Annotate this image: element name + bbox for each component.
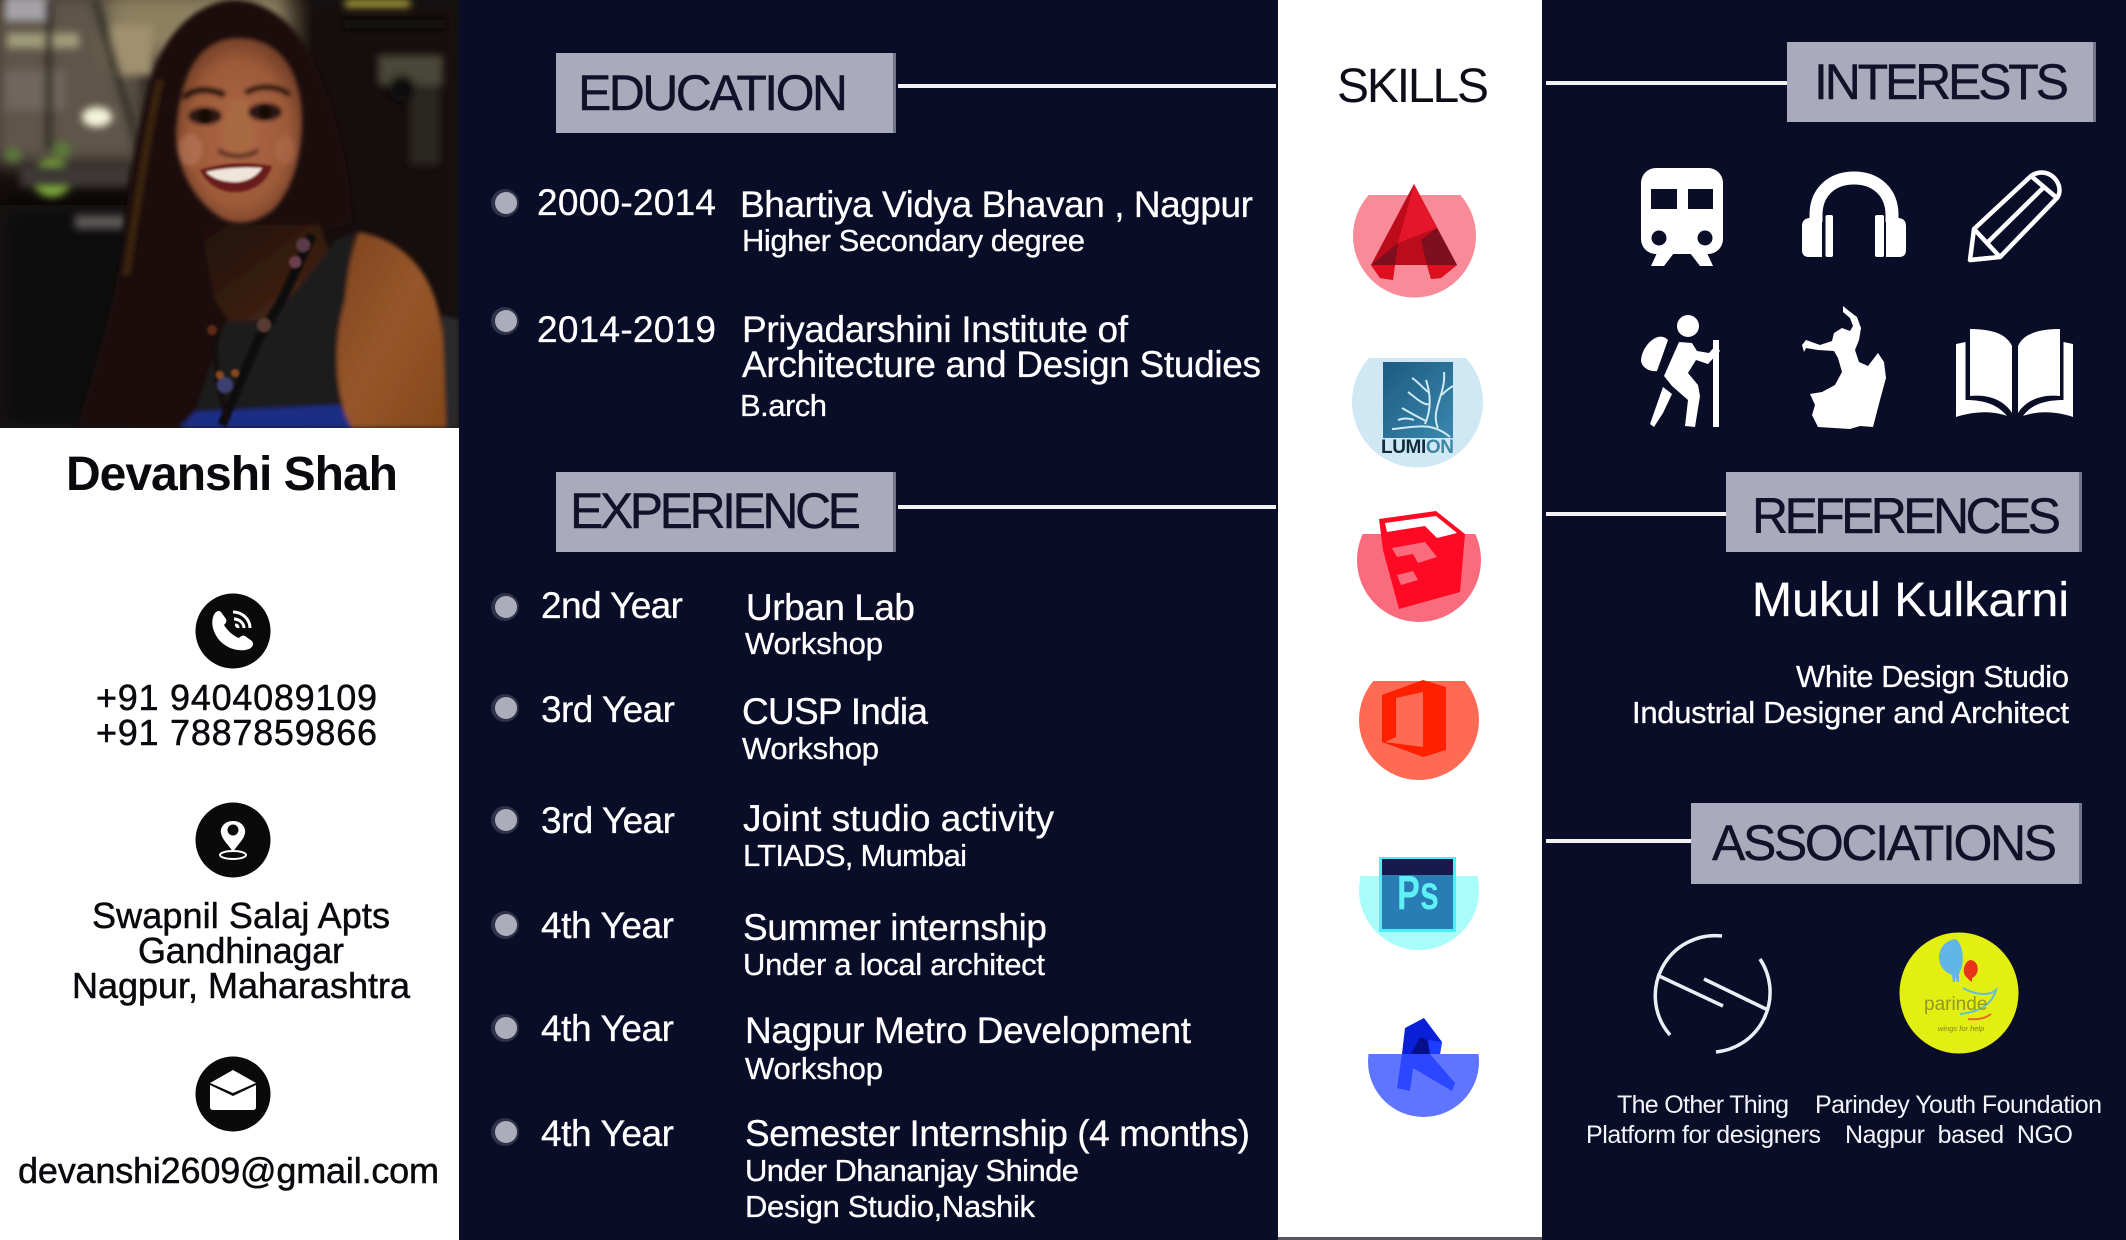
icon: train xyxy=(1641,168,1723,266)
heading: references xyxy=(1726,472,2082,552)
logo: parinde xyxy=(1900,932,2018,1054)
caption: parindey youth foundation: Parindey Youth Foundation xyxy=(1815,1091,2102,1119)
icon: book xyxy=(1956,329,2073,417)
panel: interests xyxy=(1546,42,2096,429)
entry: college xyxy=(491,307,1261,423)
entry: school: Higher Secondary degree xyxy=(742,223,1085,258)
email address: devanshi2609@gmail.com xyxy=(18,1150,439,1191)
panel: experience xyxy=(491,472,1276,1224)
caption: parindey youth foundation: Nagpur based NGO xyxy=(1845,1121,2073,1149)
logo: parinde: wings for help xyxy=(1938,1024,1984,1033)
panel: profile sidebar xyxy=(0,0,460,1240)
logo: the other thing xyxy=(1655,936,1770,1052)
entry: joint studio: Joint studio activity xyxy=(743,798,1054,839)
icon: photoshop: Ps xyxy=(1397,867,1439,920)
entry: college: Priyadarshini Institute of xyxy=(742,309,1129,350)
entry: semester internship: 4th Year xyxy=(541,1113,674,1154)
icon: dancer xyxy=(1802,306,1886,429)
heading: associations: ASSOCIATIONS xyxy=(1712,815,2057,871)
icon: pencil xyxy=(1970,173,2060,260)
phone numbers xyxy=(96,677,377,753)
icon: lumion xyxy=(1352,358,1483,468)
icon: autocad xyxy=(1353,174,1476,298)
panel: references xyxy=(1546,472,2082,730)
entry: cusp india xyxy=(491,689,928,766)
icon: lumion: LUMION xyxy=(1381,437,1454,458)
reference details: White Design Studio xyxy=(1796,659,2069,694)
profile photo xyxy=(0,0,460,430)
panel: education xyxy=(491,53,1276,423)
entry: urban lab xyxy=(491,585,915,661)
heading: skills: SKILLS xyxy=(1337,60,1489,113)
entry: semester internship xyxy=(491,1113,1250,1224)
reference details xyxy=(1632,659,2069,730)
entry: college: Architecture and Design Studies xyxy=(742,344,1261,385)
entry: college: B.arch xyxy=(740,388,827,423)
heading: experience xyxy=(556,472,896,552)
address: Nagpur, Maharashtra xyxy=(72,965,411,1006)
heading: interests: INTERESTS xyxy=(1814,54,2069,110)
connector line xyxy=(1546,512,1727,516)
entry: cusp india: CUSP India xyxy=(742,691,928,732)
entry: joint studio xyxy=(491,798,1054,873)
entry: cusp india: Workshop xyxy=(742,731,879,766)
address: Swapnil Salaj Apts xyxy=(92,895,390,936)
caption: the other thing: The Other Thing xyxy=(1617,1091,1789,1119)
icon: hiker xyxy=(1641,315,1720,427)
entry: summer internship: 4th Year xyxy=(541,905,674,946)
entry: school: Bhartiya Vidya Bhavan , Nagpur xyxy=(740,184,1253,225)
caption: the other thing: Platform for designers xyxy=(1586,1121,1821,1149)
heading: education xyxy=(556,53,896,133)
entry: semester internship: Under Dhananjay Shinde xyxy=(745,1153,1079,1188)
entry: semester internship: Design Studio,Nashik xyxy=(745,1189,1036,1224)
icon: phone xyxy=(196,594,270,668)
panel: skills xyxy=(1278,0,1542,1240)
heading: education: EDUCATION xyxy=(578,65,848,121)
entry: summer internship: Summer internship xyxy=(743,907,1047,948)
caption: the other thing xyxy=(1586,1091,1821,1149)
entry: joint studio: 3rd Year xyxy=(541,800,675,841)
heading: experience: EXPERIENCE xyxy=(570,483,861,539)
entry: urban lab: 2nd Year xyxy=(541,585,683,626)
phone numbers: +91 7887859866 xyxy=(96,712,377,753)
logo: parinde: parinde xyxy=(1924,994,1987,1015)
icon: office xyxy=(1359,680,1479,780)
entry: metro development: Nagpur Metro Development xyxy=(745,1010,1192,1051)
reference details: Industrial Designer and Architect xyxy=(1632,695,2069,730)
icon: revit xyxy=(1368,1018,1479,1117)
entry: metro development: 4th Year xyxy=(541,1008,674,1049)
entry: urban lab: Workshop xyxy=(745,626,883,661)
entry: school: 2000-2014 xyxy=(537,182,716,223)
reference name: Mukul Kulkarni xyxy=(1752,574,2069,627)
connector line xyxy=(898,505,1276,509)
entry: school xyxy=(491,182,1253,258)
icon: sketchup xyxy=(1357,511,1481,622)
entry: summer internship xyxy=(491,905,1047,982)
caption: parindey youth foundation xyxy=(1815,1091,2102,1149)
entry: summer internship: Under a local architect xyxy=(743,947,1045,982)
icon: location xyxy=(196,802,270,878)
panel: associations xyxy=(1546,803,2102,1149)
entry: semester internship: Semester Internship (4 months) xyxy=(745,1113,1250,1154)
entry: metro development: Workshop xyxy=(745,1051,883,1086)
name: Devanshi Shah xyxy=(66,448,398,501)
address: Gandhinagar xyxy=(138,930,344,971)
connector line xyxy=(898,84,1276,88)
address xyxy=(72,895,411,1006)
icon: email xyxy=(196,1056,270,1132)
phone numbers: +91 9404089109 xyxy=(96,677,377,718)
entry: metro development xyxy=(491,1008,1192,1086)
heading: interests xyxy=(1787,42,2096,122)
icon: headphones xyxy=(1802,178,1906,257)
entry: cusp india: 3rd Year xyxy=(541,689,675,730)
entry: joint studio: LTIADS, Mumbai xyxy=(743,838,967,873)
entry: college: 2014-2019 xyxy=(537,309,716,350)
heading: associations xyxy=(1691,803,2082,884)
connector line xyxy=(1546,81,1788,85)
icon: photoshop xyxy=(1359,857,1479,950)
heading: references: REFERENCES xyxy=(1752,488,2061,544)
connector line xyxy=(1546,839,1692,843)
entry: urban lab: Urban Lab xyxy=(746,587,915,628)
